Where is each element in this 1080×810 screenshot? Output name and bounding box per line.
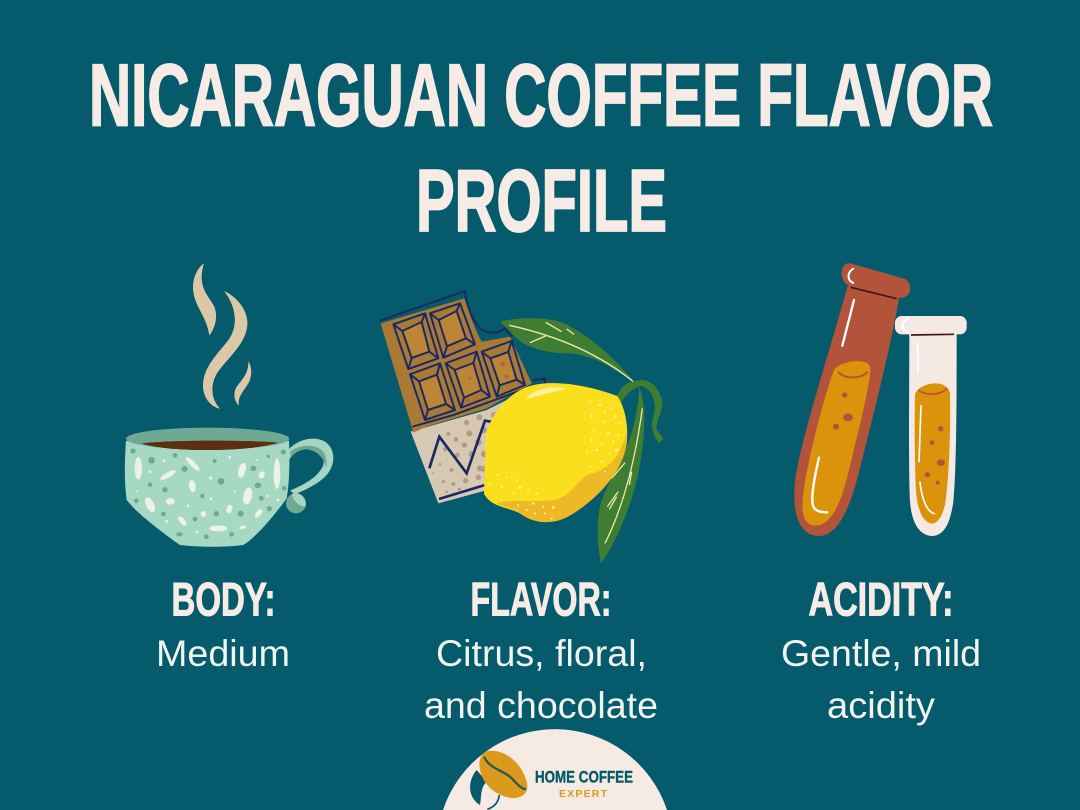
acidity column text: ACIDITY: xyxy=(808,572,954,626)
title: PROFILE xyxy=(416,151,667,250)
coffee surface xyxy=(142,441,278,450)
logo wordmark: HOME COFFEE xyxy=(535,768,633,786)
acidity column text xyxy=(781,572,981,726)
chocolate wrapper xyxy=(411,390,527,503)
small white test tube xyxy=(895,316,967,536)
lemon xyxy=(484,383,627,522)
lemon leaves xyxy=(500,318,663,563)
flavor column text: Citrus, floral, xyxy=(436,633,647,674)
logo badge xyxy=(443,729,667,810)
acidity column text: acidity xyxy=(827,685,935,726)
chocolate squares xyxy=(393,303,525,420)
cup body xyxy=(125,441,289,547)
flavor column text: and chocolate xyxy=(424,685,658,726)
chocolate bar xyxy=(380,291,545,433)
body column text xyxy=(156,572,290,674)
body column text: BODY: xyxy=(172,572,276,626)
title xyxy=(89,46,993,250)
icon: chocolate bar and lemon xyxy=(380,291,663,563)
large red test tube xyxy=(794,263,910,536)
cup handle xyxy=(288,439,333,494)
icon: coffee cup with steam xyxy=(125,263,333,547)
acidity column text: Gentle, mild xyxy=(781,633,981,674)
body column text: Medium xyxy=(156,633,290,674)
logo badge: EXPERT xyxy=(559,788,608,800)
flavor column text: FLAVOR: xyxy=(470,572,612,626)
cup speckles xyxy=(135,456,280,533)
flavor column text xyxy=(424,572,658,726)
steam wisps xyxy=(193,263,251,409)
cup rim xyxy=(126,428,289,450)
icon: test tubes xyxy=(794,263,967,536)
icon: coffee bean logo xyxy=(470,751,527,809)
